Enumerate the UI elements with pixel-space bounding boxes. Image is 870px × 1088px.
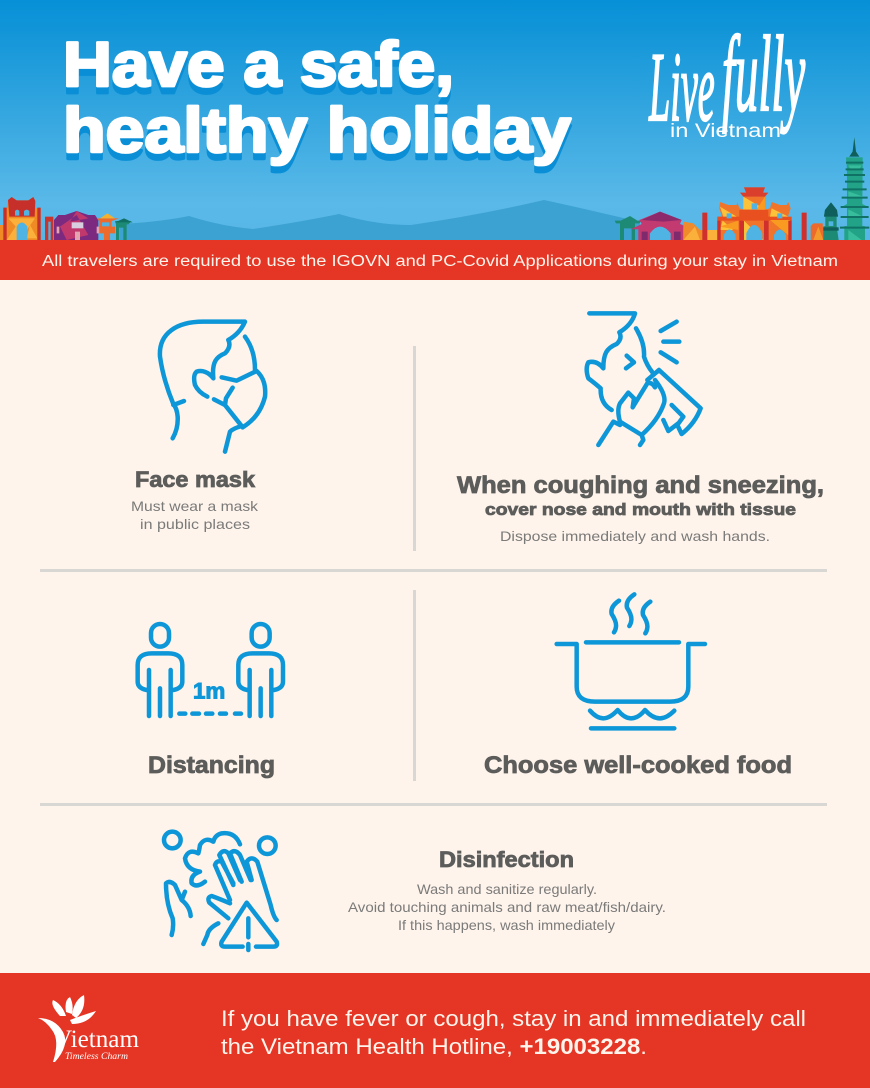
divider: vertical two <box>413 590 416 781</box>
logo: Live fully in Vietnam: in Vietnam <box>670 121 781 142</box>
divider: horizontal two <box>40 803 827 806</box>
text block: coughing and sneezing: cover nose and mouth with tissue <box>485 500 796 519</box>
title <box>63 30 571 173</box>
icon: distancing <box>138 624 283 716</box>
icon: cooking pot <box>557 594 705 728</box>
logo: Vietnam Timeless Charm: Vietnam <box>54 1026 140 1053</box>
illustration: left skyline <box>0 197 133 240</box>
text block: hotline call to action: If you have fever or cough, stay in and immediately call <box>221 1006 806 1031</box>
text block: coughing and sneezing: When coughing and sneezing, <box>457 472 824 499</box>
text block: disinfection <box>348 847 666 933</box>
logo: Live fully in Vietnam <box>648 15 805 142</box>
panel: footer <box>0 973 870 1088</box>
text block: face mask: Must wear a mask <box>131 498 259 514</box>
text block: disinfection: Disinfection <box>439 847 574 872</box>
title: healthy holiday <box>63 96 571 166</box>
text block: disinfection: Avoid touching animals and raw meat/fish/dairy. <box>348 899 666 915</box>
text block: hotline call to action: the Vietnam Health Hotline, +19003228 . <box>221 1034 647 1059</box>
text block: disinfection: Wash and sanitize regularly. <box>417 881 597 897</box>
panel: sky header <box>0 0 870 240</box>
heading: well-cooked food: Choose well-cooked food <box>484 752 792 779</box>
text block: disinfection: If this happens, wash immediately <box>398 917 615 933</box>
logo: Vietnam Timeless Charm: Timeless Charm <box>65 1051 129 1061</box>
text block: face mask <box>131 467 259 532</box>
banner: app requirement <box>0 240 870 280</box>
text block: coughing and sneezing: Dispose immediately and wash hands. <box>500 528 770 544</box>
text block: face mask: in public places <box>140 516 250 532</box>
title: Have a safe, <box>63 37 454 107</box>
icon: hand washing <box>164 832 277 950</box>
divider: horizontal one <box>40 569 827 572</box>
text block: face mask: Face mask <box>135 467 256 492</box>
text block: hotline call to action <box>221 1006 806 1059</box>
icon: distancing: 1m <box>193 678 225 703</box>
illustration: right skyline <box>615 137 869 240</box>
heading: distancing: Distancing <box>148 752 275 779</box>
title: healthy holiday <box>63 103 571 173</box>
banner: app requirement: All travelers are required to use the IGOVN and PC-Covid Applications during your stay in Vietnam <box>42 253 838 270</box>
title: Have a safe, <box>63 30 454 100</box>
logo: Live fully in Vietnam: Live <box>648 33 715 142</box>
divider: vertical one <box>413 346 416 551</box>
mountains <box>120 200 640 240</box>
icon: face mask <box>160 322 265 452</box>
icon: coughing <box>587 313 701 445</box>
logo: Live fully in Vietnam: fully <box>722 15 805 135</box>
text block: coughing and sneezing <box>457 472 824 544</box>
logo: Vietnam Timeless Charm <box>38 995 140 1062</box>
